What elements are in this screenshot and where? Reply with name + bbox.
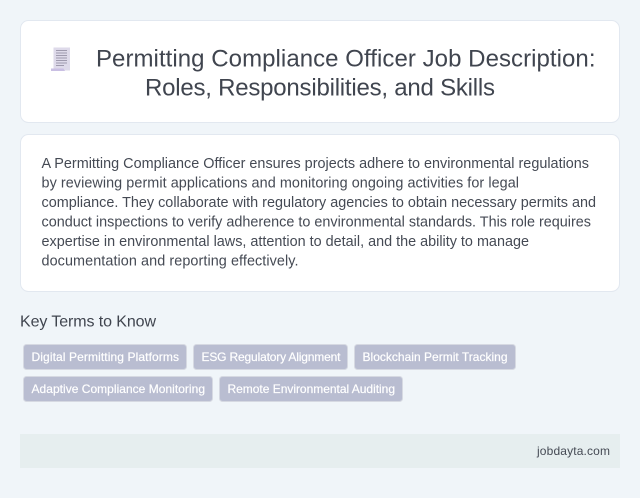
tag: Digital Permitting Platforms [24,344,186,370]
heading: key terms: Key Terms to Know [20,314,156,330]
description text: by reviewing permit applications and monitoring ongoing activities for legal [42,176,519,192]
description text: expertise in environmental laws, attention to detail, and the ability to manage [42,234,529,250]
footer bar [20,434,620,468]
description text: conduct inspections to verify adherence to environmental standards. This role requires [42,214,591,230]
tag: Adaptive Compliance Monitoring [24,376,212,402]
description text: A Permitting Compliance Officer ensures projects adhere to environmental regulations [42,156,589,172]
title: Roles, Responsibilities, and Skills [145,74,495,102]
tag: Remote Environmental Auditing [220,376,402,402]
footer source: jobdayta.com [536,444,610,458]
description text: documentation and reporting effectively. [42,254,298,270]
title [96,46,596,102]
panel: description card [20,134,620,292]
panel: title card [20,20,620,122]
title: Permitting Compliance Officer Job Description: [96,46,596,72]
tag: Blockchain Permit Tracking [354,344,516,370]
icon: document scroll [51,48,70,71]
tag: ESG Regulatory Alignment [194,344,348,370]
tag: Blockchain Permit Tracking: Blockchain Permit Tracking [362,350,508,364]
tag: Remote Environmental Auditing: Remote Environmental Auditing [228,382,395,396]
tag: ESG Regulatory Alignment: ESG Regulatory Alignment [202,350,341,364]
description text: compliance. They collaborate with regulatory agencies to obtain necessary permits and [42,195,596,211]
description text [42,156,596,270]
tag: Adaptive Compliance Monitoring: Adaptive Compliance Monitoring [32,382,205,396]
tag: Digital Permitting Platforms: Digital Permitting Platforms [32,350,179,364]
